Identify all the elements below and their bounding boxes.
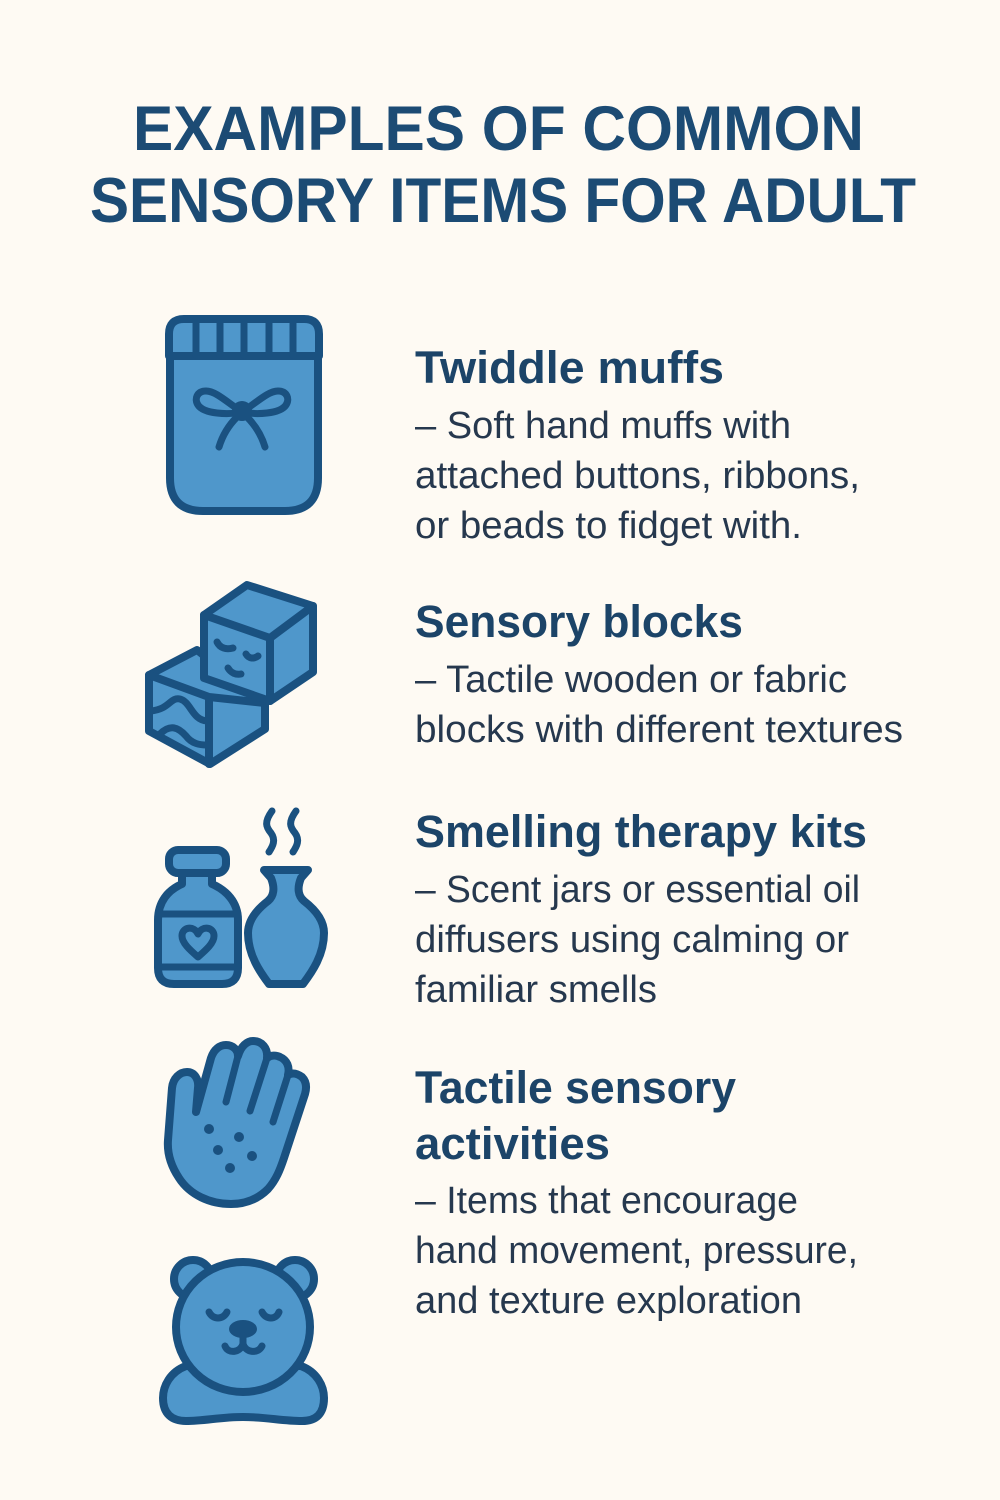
text: sensory blocks: Sensory blocks bbox=[415, 596, 743, 647]
text: twiddle muffs: – Soft hand muffs with bbox=[415, 405, 791, 447]
text: sensory blocks: – Tactile wooden or fabric bbox=[415, 659, 847, 701]
icon: twiddle muff bbox=[169, 319, 319, 511]
text: sensory blocks bbox=[415, 596, 903, 751]
text: tactile sensory activities: and texture exploration bbox=[415, 1280, 802, 1322]
icon: weighted teddy bear bbox=[163, 1260, 324, 1421]
text: smelling therapy kits bbox=[415, 806, 867, 1011]
text: tactile sensory activities: Tactile sensory bbox=[415, 1062, 736, 1113]
icon: scent bottle and diffuser vase bbox=[158, 811, 324, 984]
icon: sensory blocks bbox=[149, 585, 313, 764]
text: smelling therapy kits: Smelling therapy kits bbox=[415, 806, 867, 857]
title: SENSORY ITEMS FOR ADULT bbox=[90, 166, 916, 236]
icon: tactile hand bbox=[168, 1041, 306, 1204]
text: twiddle muffs: or beads to fidget with. bbox=[415, 505, 802, 547]
text: sensory blocks: blocks with different textures bbox=[415, 709, 903, 751]
text: twiddle muffs bbox=[415, 342, 860, 547]
text: tactile sensory activities bbox=[415, 1062, 858, 1322]
text: smelling therapy kits: diffusers using calming or bbox=[415, 919, 849, 961]
text: smelling therapy kits: familiar smells bbox=[415, 969, 657, 1011]
text: tactile sensory activities: activities bbox=[415, 1118, 610, 1169]
text: twiddle muffs: Twiddle muffs bbox=[415, 342, 724, 393]
text: smelling therapy kits: – Scent jars or essential oil bbox=[415, 869, 860, 911]
title: EXAMPLES OF COMMON bbox=[133, 94, 864, 164]
title bbox=[90, 94, 916, 236]
text: twiddle muffs: attached buttons, ribbons, bbox=[415, 455, 860, 497]
text: tactile sensory activities: hand movement, pressure, bbox=[415, 1230, 858, 1272]
text: tactile sensory activities: – Items that encourage bbox=[415, 1180, 798, 1222]
